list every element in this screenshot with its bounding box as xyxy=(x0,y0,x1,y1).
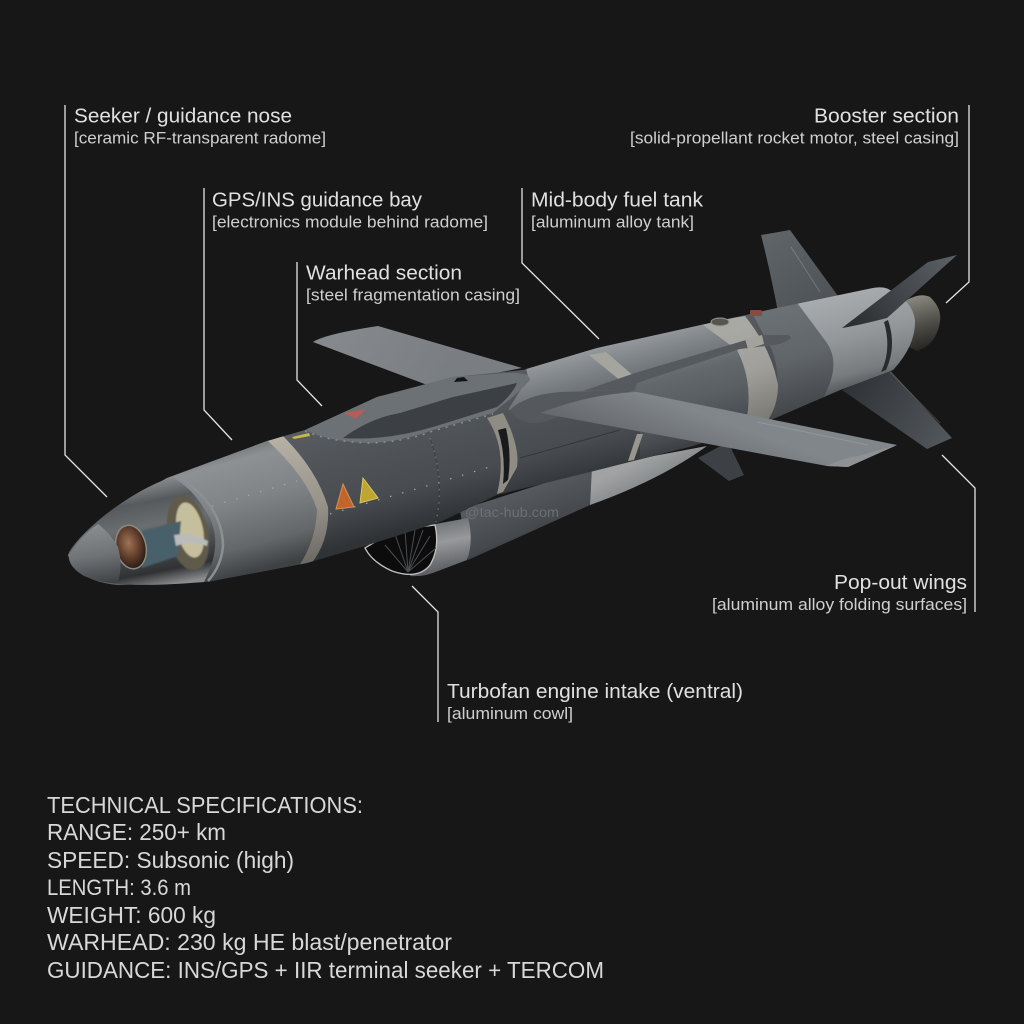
callout: mid-body fuel tank: Mid-body fuel tank xyxy=(531,188,704,212)
seeker lens xyxy=(112,522,150,572)
callout: pop-out wings: [aluminum alloy folding surfaces] xyxy=(712,596,967,614)
near wing xyxy=(540,392,897,467)
fuselage xyxy=(68,287,915,585)
illustration: cruise missile xyxy=(50,230,957,600)
callout: seeker / guidance nose xyxy=(65,104,326,497)
hazard label orange xyxy=(336,484,354,509)
technical specifications: WEIGHT: 600 kg xyxy=(47,902,216,928)
callout: GPS/INS guidance bay xyxy=(204,188,488,440)
rear body section xyxy=(508,324,748,460)
callout: warhead section: [steel fragmentation casing] xyxy=(306,286,520,304)
technical specifications: GUIDANCE: INS/GPS + IIR terminal seeker + TERCOM xyxy=(47,957,604,983)
callout: GPS/INS guidance bay: [electronics module behind radome] xyxy=(212,214,488,232)
callout: seeker / guidance nose: Seeker / guidance nose xyxy=(74,104,292,128)
fan blades xyxy=(385,530,436,572)
watermark: @tac-hub.com xyxy=(465,504,559,520)
ventral engine pod xyxy=(460,446,707,560)
yellow marking xyxy=(292,433,310,439)
technical specifications xyxy=(47,792,604,983)
callout: pop-out wings xyxy=(712,455,975,614)
technical specifications: LENGTH: 3.6 m xyxy=(47,875,191,900)
callout: warhead section xyxy=(297,262,520,406)
callout: warhead section: Warhead section xyxy=(306,262,462,284)
nose band xyxy=(268,436,328,566)
technical specifications: RANGE: 250+ km xyxy=(47,819,226,845)
wing root fairing xyxy=(510,390,635,423)
lower tail fin xyxy=(842,368,952,449)
technical specifications: WARHEAD: 230 kg HE blast/penetrator xyxy=(47,929,452,955)
rear body band xyxy=(700,316,778,425)
callout: pop-out wings: Pop-out wings xyxy=(834,571,967,594)
nose section xyxy=(68,440,317,585)
ventral small fin xyxy=(698,442,744,481)
under-wing band xyxy=(628,434,643,461)
booster dark ring xyxy=(881,320,892,372)
technical specifications: TECHNICAL SPECIFICATIONS: xyxy=(47,792,363,818)
callout: seeker / guidance nose: [ceramic RF-transparent radome] xyxy=(74,130,326,148)
callout: mid-body fuel tank: [aluminum alloy tank] xyxy=(531,214,694,232)
conduit raceway xyxy=(583,335,791,391)
nozzle xyxy=(905,295,940,351)
mid body slot ring xyxy=(487,413,517,494)
glass radome xyxy=(69,477,215,585)
warning triangle red xyxy=(344,409,366,419)
nose tip xyxy=(69,524,120,582)
far wing xyxy=(313,326,522,386)
callout: booster section xyxy=(630,104,969,303)
callout: GPS/INS guidance bay: GPS/INS guidance bay xyxy=(212,188,423,212)
hazard label yellow xyxy=(360,478,378,503)
raceway collar xyxy=(745,335,764,349)
panel seams and rivets xyxy=(212,430,620,522)
red hatch xyxy=(750,310,762,316)
upper right tail fin xyxy=(842,255,957,328)
callout: booster section: [solid-propellant rocket motor, steel casing] xyxy=(630,130,959,148)
mid body section xyxy=(68,287,912,585)
top tail fin xyxy=(761,230,838,312)
top hatch xyxy=(711,318,729,326)
dorsal fairing xyxy=(305,373,530,443)
seeker gimbal xyxy=(142,492,215,574)
radome rim xyxy=(178,476,223,581)
engine intake cowl xyxy=(365,518,471,576)
callout: mid-body fuel tank xyxy=(522,188,704,339)
callout: turbofan engine intake: [aluminum cowl] xyxy=(447,705,573,723)
technical specifications: SPEED: Subsonic (high) xyxy=(47,847,294,873)
callout: booster section: Booster section xyxy=(814,104,959,128)
mid body stripe xyxy=(590,352,632,379)
callout: turbofan engine intake xyxy=(412,586,743,723)
callout: turbofan engine intake: Turbofan engine intake (ventral) xyxy=(447,680,743,703)
booster section xyxy=(798,287,915,397)
aft dark section xyxy=(754,304,900,420)
